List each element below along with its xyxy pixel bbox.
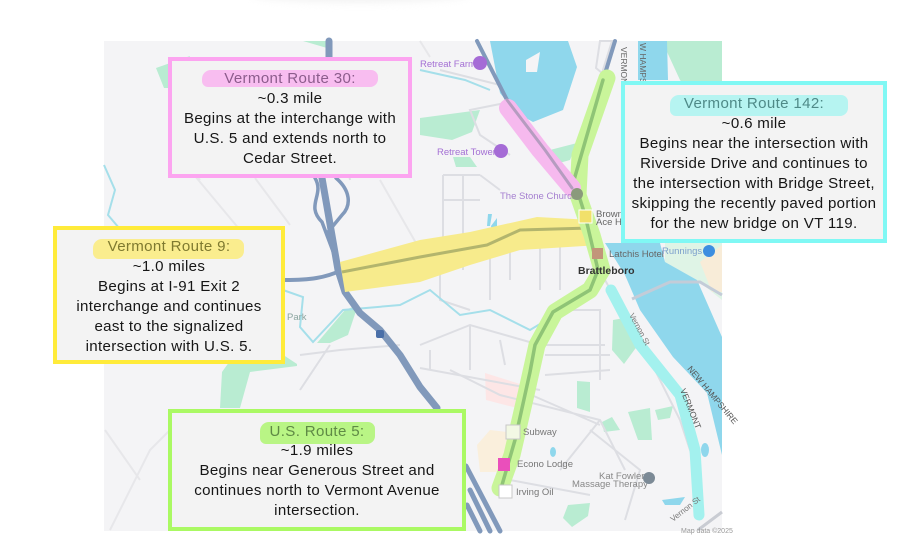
map labels: Brattleboro — [578, 265, 635, 277]
parks and land areas — [156, 41, 722, 527]
map labels: Subway — [523, 427, 557, 438]
rivers and brooks — [104, 70, 580, 360]
text: Vermont Route 142 details — [632, 115, 876, 232]
map labels: VERMONT — [678, 387, 703, 430]
map labels: Kat Fowler — [599, 471, 644, 482]
callout: Vermont Route 9 — [53, 226, 285, 364]
map labels: Massage Therapy — [572, 479, 648, 490]
map labels: Runnings — [662, 246, 702, 257]
text: U.S. Route 5 details — [194, 442, 440, 519]
interstate shield — [376, 330, 384, 338]
map labels: VERMONT — [619, 47, 629, 90]
heading highlight: Vermont Route 142 — [670, 95, 848, 116]
map labels: Latchis Hotel — [609, 249, 664, 260]
map labels: Brown — [596, 209, 623, 220]
text: Vermont Route 142 details: Riverside Drive and continues to — [640, 155, 868, 172]
map labels: Park — [287, 312, 307, 323]
map labels: Map data ©2025 — [681, 527, 733, 535]
heading highlight: Vermont Route 30 — [202, 70, 378, 87]
heading highlight: U.S. Route 5 — [260, 422, 375, 444]
heading: Vermont Route 142: Vermont Route 142: — [684, 95, 824, 112]
text: Vermont Route 30 details: Cedar Street. — [243, 150, 337, 167]
text: Vermont Route 9 details: interchange and continues — [76, 298, 262, 315]
water — [487, 41, 722, 505]
text: U.S. Route 5 details: continues north to Vermont Avenue — [194, 482, 440, 499]
highlighted segment: Vermont Route 142 — [611, 290, 699, 515]
text: Vermont Route 142 details: Begins near the intersection with — [639, 135, 869, 152]
map labels: W HAMPS — [638, 43, 648, 84]
heading: Vermont Route 9: Vermont Route 9: — [108, 238, 230, 255]
callout: U.S. Route 5 — [168, 409, 466, 531]
map labels: The Stone Church — [500, 191, 577, 202]
minor streets — [300, 41, 700, 520]
map labels: NEW HAMPSHIRE — [685, 364, 740, 426]
interstate and major roads — [285, 41, 615, 531]
top shadow — [250, 0, 470, 2]
highlighted segment: U.S. Route 5 — [500, 78, 607, 488]
map labels: Retreat Tower — [437, 147, 496, 158]
text: Vermont Route 30 details: U.S. 5 and extends north to — [194, 130, 386, 147]
text: Vermont Route 9 details — [76, 258, 262, 355]
heading: U.S. Route 5: U.S. Route 5: — [270, 423, 364, 440]
text: Vermont Route 142 details: the intersection with Bridge Street, — [633, 175, 875, 192]
heading: Vermont Route 30: Vermont Route 30: — [224, 70, 356, 87]
map labels: Vernon St — [669, 494, 703, 524]
map labels — [287, 43, 740, 535]
callout: Vermont Route 30 — [168, 57, 412, 178]
text: U.S. Route 5 details: ~1.9 miles — [281, 442, 353, 459]
text: Vermont Route 30 details: ~0.3 mile — [258, 90, 322, 107]
text: Vermont Route 142 details: for the new bridge on VT 119. — [650, 215, 858, 232]
callout: Vermont Route 142 — [621, 81, 887, 243]
text: Vermont Route 9 details: ~1.0 miles — [133, 258, 205, 275]
heading highlight: Vermont Route 9 — [93, 239, 244, 259]
map labels: Econo Lodge — [517, 459, 573, 470]
text: Vermont Route 142 details: skipping the recently paved portion — [632, 195, 876, 212]
map labels: Retreat Farm — [420, 59, 476, 70]
highlighted segment: Vermont Route 30 — [507, 100, 572, 188]
text: Vermont Route 9 details: east to the signalized — [94, 318, 244, 335]
text: Vermont Route 9 details: Begins at I-91 Exit 2 — [98, 278, 240, 295]
text: U.S. Route 5 details: Begins near Generous Street and — [199, 462, 435, 479]
text: U.S. Route 5 details: intersection. — [274, 502, 360, 519]
text: Vermont Route 9 details: intersection with U.S. 5. — [86, 338, 252, 355]
text: Vermont Route 30 details — [184, 90, 396, 167]
highlighted segment: Vermont Route 9 — [340, 217, 600, 292]
text: Vermont Route 30 details: Begins at the interchange with — [184, 110, 396, 127]
map labels: Irving Oil — [516, 487, 553, 498]
text: Vermont Route 142 details: ~0.6 mile — [722, 115, 786, 132]
map labels: Vernon St — [627, 312, 652, 348]
map labels: Ace Ha — [596, 217, 628, 228]
